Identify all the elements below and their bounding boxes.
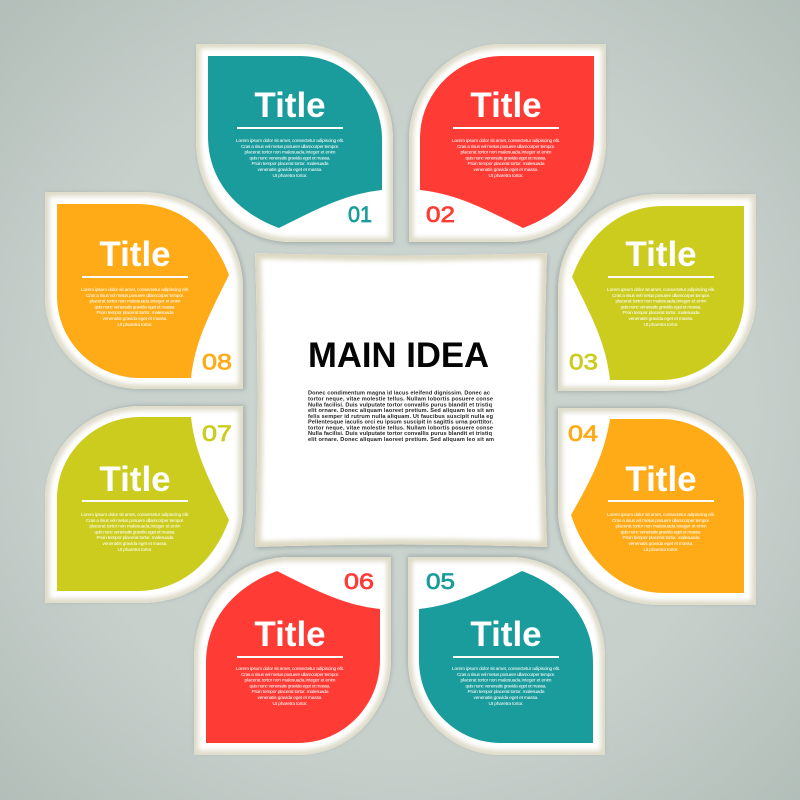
text block: quis nunc venenatis gravida eget et massa. <box>620 529 702 535</box>
text block: quis nunc venenatis gravida eget et massa. <box>94 304 176 310</box>
card shape <box>45 406 243 603</box>
number: 05 <box>426 569 455 594</box>
text block: main idea body: Nulla facilisi. Duis vulputate tortor convallis purus blandit et tristiq <box>308 431 493 437</box>
text block: Ut pharetra tortor. <box>272 701 308 707</box>
title rule <box>608 500 714 502</box>
panel: step 04 <box>558 408 756 605</box>
number: 06 <box>344 569 374 594</box>
text block: placerat tortor non malesuada.Integer et enim <box>244 150 336 156</box>
title rule <box>608 276 714 278</box>
text block: Ut pharetra tortor. <box>118 322 152 328</box>
number: 02 <box>426 202 455 227</box>
text block: Proin tempor placerat tortor. malesuada <box>96 310 174 316</box>
text block: Proin tempor placerat tortor. malesuada <box>252 689 329 695</box>
text block: quis nunc venenatis gravida eget et massa. <box>620 304 702 310</box>
card shape <box>194 557 391 755</box>
title rule <box>82 500 188 502</box>
text block: Lorem ipsum dolor sit amet, consectetur adipiscing elit. <box>452 666 560 672</box>
title rule <box>453 656 559 658</box>
card shape <box>558 194 756 391</box>
panel: step 08 <box>45 192 243 389</box>
panel: step 05 <box>408 557 605 755</box>
text block: Lorem ipsum dolor sit amet, consectetur adipiscing elit. <box>607 512 715 518</box>
text block: main idea body: Nulla facilisi. Duis vulputate tortor convallis purus blandit et tristiq <box>308 402 493 408</box>
text block: main idea body: elit ornare. Donec aliquam laoreet pretium. Sed aliquam leo sit am <box>308 437 494 443</box>
text block: Lorem ipsum dolor sit amet, consectetur adipiscing elit. <box>607 287 715 293</box>
card shape <box>408 557 605 755</box>
text block: Lorem ipsum dolor sit amet, consectetur adipiscing elit. <box>236 666 344 672</box>
text block: venenatis gravida eget et massa. <box>628 541 694 547</box>
text block: main idea body: tortor neque, vitae molestie tellus. Nullam lobortis posuere conse <box>308 396 493 402</box>
title rule <box>237 127 343 129</box>
text block: venenatis gravida eget et massa. <box>628 316 694 322</box>
heading: Title <box>470 615 542 654</box>
text block: Cras a risus vel metus posuere ullamcorper tempor. <box>241 672 339 678</box>
number: 08 <box>202 350 232 374</box>
text block: Proin tempor placerat tortor. malesuada <box>96 535 174 541</box>
text block: venenatis gravida eget et massa. <box>102 541 168 547</box>
text block: quis nunc venenatis gravida eget et massa. <box>94 529 176 535</box>
text block: placerat tortor non malesuada.Integer et enim <box>460 150 552 156</box>
text block: main idea body: felis semper id rutrum nulla aliquam. Ut faucibus suscipit nulla eg <box>308 414 494 420</box>
text block: Ut pharetra tortor. <box>488 173 524 179</box>
text block: quis nunc venenatis gravida eget et massa. <box>466 683 546 689</box>
text block: Cras a risus vel metus posuere ullamcorper tempor. <box>241 144 339 150</box>
text block: venenatis gravida eget et massa. <box>474 167 538 173</box>
panel: step 06 <box>194 557 391 755</box>
heading: main idea: MAIN IDEA <box>308 336 489 375</box>
heading: Title <box>99 235 171 274</box>
text block: venenatis gravida eget et massa. <box>102 316 168 322</box>
heading: Title <box>254 615 326 654</box>
text block: quis nunc venenatis gravida eget et massa. <box>250 683 330 689</box>
text block: Lorem ipsum dolor sit amet, consectetur adipiscing elit. <box>81 287 189 293</box>
text block: quis nunc venenatis gravida eget et massa. <box>250 155 330 161</box>
heading: Title <box>99 460 171 499</box>
text block: placerat tortor non malesuada.Integer et enim <box>90 524 180 530</box>
text block: venenatis gravida eget et massa. <box>258 695 322 701</box>
heading: Title <box>470 86 542 125</box>
title rule <box>82 276 188 278</box>
card shape <box>196 44 393 242</box>
text block: main idea body: tortor neque, vitae molestie tellus. Nullam lobortis posuere conse <box>308 426 493 432</box>
text block: main idea body: Pellentesque iaculis orci eu ipsum suscipit in sagittis urna porttitor. <box>308 420 493 426</box>
number: 04 <box>568 421 598 446</box>
heading: Title <box>625 460 697 499</box>
text block: main idea body: Donec condimentum magna id lacus eleifend dignissim. Donec ac <box>308 390 490 396</box>
text block: Cras a risus vel metus posuere ullamcorper tempor. <box>457 144 555 150</box>
text block: main idea body: elit ornare. Donec aliquam laoreet pretium. Sed aliquam leo sit am <box>308 408 494 414</box>
title rule <box>453 127 559 129</box>
text block: venenatis gravida eget et massa. <box>258 167 322 173</box>
center pillow shape <box>255 253 547 547</box>
text block: Cras a risus vel metus posuere ullamcorper tempor. <box>612 518 710 524</box>
card shape <box>45 192 243 389</box>
text block: Ut pharetra tortor. <box>644 547 678 553</box>
text block: Proin tempor placerat tortor. malesuada <box>622 310 700 316</box>
text block: Ut pharetra tortor. <box>118 547 152 553</box>
text block: Lorem ipsum dolor sit amet, consectetur adipiscing elit. <box>452 138 560 144</box>
card shape <box>558 408 756 605</box>
text block: Cras a risus vel metus posuere ullamcorper tempor. <box>612 293 710 299</box>
text block: Ut pharetra tortor. <box>488 701 524 707</box>
text block: quis nunc venenatis gravida eget et massa. <box>466 155 546 161</box>
panel: step 01 <box>196 44 393 242</box>
text block: Cras a risus vel metus posuere ullamcorper tempor. <box>86 293 184 299</box>
card shape <box>409 44 606 242</box>
text block: Ut pharetra tortor. <box>644 322 678 328</box>
panel: step 02 <box>409 44 606 242</box>
text block: Proin tempor placerat tortor. malesuada <box>252 161 329 167</box>
text block: Lorem ipsum dolor sit amet, consectetur adipiscing elit. <box>81 512 189 518</box>
text block: placerat tortor non malesuada.Integer et enim <box>244 678 336 684</box>
number: 07 <box>202 421 232 446</box>
text block: Ut pharetra tortor. <box>272 173 308 179</box>
text block: Cras a risus vel metus posuere ullamcorper tempor. <box>86 518 184 524</box>
text block: Lorem ipsum dolor sit amet, consectetur adipiscing elit. <box>236 138 344 144</box>
number: 03 <box>569 350 598 374</box>
text block: placerat tortor non malesuada.Integer et enim <box>616 524 706 530</box>
panel: step 07 <box>45 406 243 603</box>
text block: Proin tempor placerat tortor. malesuada <box>622 535 700 541</box>
text block: Proin tempor placerat tortor. malesuada <box>468 689 545 695</box>
text block: venenatis gravida eget et massa. <box>474 695 538 701</box>
heading: Title <box>625 235 697 274</box>
panel: step 03 <box>558 194 756 391</box>
text block: Cras a risus vel metus posuere ullamcorper tempor. <box>457 672 555 678</box>
text block: Proin tempor placerat tortor. malesuada <box>468 161 545 167</box>
text block: placerat tortor non malesuada.Integer et enim <box>460 678 552 684</box>
title rule <box>237 656 343 658</box>
heading: Title <box>254 86 326 125</box>
number: 01 <box>348 202 372 227</box>
text block: placerat tortor non malesuada.Integer et enim <box>616 299 706 305</box>
text block: placerat tortor non malesuada.Integer et enim <box>90 299 180 305</box>
panel: main idea <box>255 253 547 547</box>
